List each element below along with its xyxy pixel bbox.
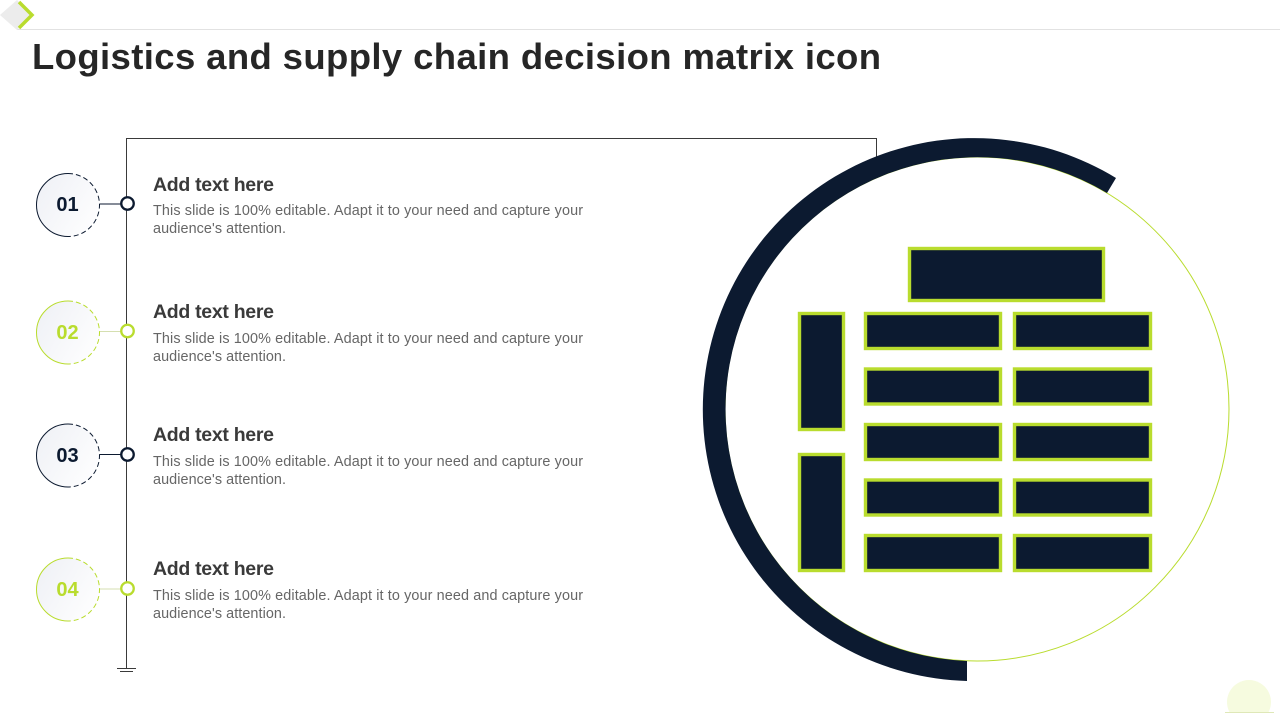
step 03 text: Add text here xyxy=(153,424,274,446)
icon: decision matrix xyxy=(800,248,1150,570)
thick navy arc xyxy=(703,138,1116,681)
step 03 text: This slide is 100% editable. Adapt it to your need and capture your xyxy=(153,454,583,470)
step 02 number badge xyxy=(36,301,100,364)
step 02 connector node xyxy=(100,325,134,337)
step 03 number badge: 03 xyxy=(56,445,79,467)
step 03 xyxy=(36,424,583,488)
step 04 number badge xyxy=(36,558,100,621)
step 02 text: This slide is 100% editable. Adapt it to your need and capture your xyxy=(153,331,583,347)
inner circle outline xyxy=(725,157,1229,661)
icon: corner semicircle xyxy=(1225,680,1274,712)
step 04 number badge: 04 xyxy=(56,579,79,601)
step 04 text xyxy=(153,558,583,622)
step 04 connector node xyxy=(100,582,134,595)
step 01 text xyxy=(153,174,583,237)
step 03 text: audience's attention. xyxy=(153,472,286,488)
step 04 text: audience's attention. xyxy=(153,606,286,622)
step 01 xyxy=(36,174,583,237)
step 04 text: This slide is 100% editable. Adapt it to your need and capture your xyxy=(153,588,583,604)
step 01 connector node xyxy=(100,197,134,210)
step 03 text xyxy=(153,424,583,488)
step 01 text: audience's attention. xyxy=(153,221,286,237)
icon: header chevron xyxy=(0,0,33,30)
step 02 text: audience's attention. xyxy=(153,349,286,365)
step 03 number badge xyxy=(36,424,100,487)
step 01 text: This slide is 100% editable. Adapt it to your need and capture your xyxy=(153,203,583,219)
step 01 text: Add text here xyxy=(153,174,274,196)
step 03 connector node xyxy=(100,448,134,461)
step 01 number badge xyxy=(36,174,100,236)
step 04 text: Add text here xyxy=(153,558,274,580)
timeline frame xyxy=(117,138,876,672)
step 02 text: Add text here xyxy=(153,301,274,323)
step 02 text xyxy=(153,301,583,365)
step 02 number badge: 02 xyxy=(56,322,79,344)
step 04 xyxy=(36,558,583,622)
title: Logistics and supply chain decision matrix icon xyxy=(32,36,881,77)
step 02 xyxy=(36,301,583,365)
step 01 number badge: 01 xyxy=(56,194,79,216)
